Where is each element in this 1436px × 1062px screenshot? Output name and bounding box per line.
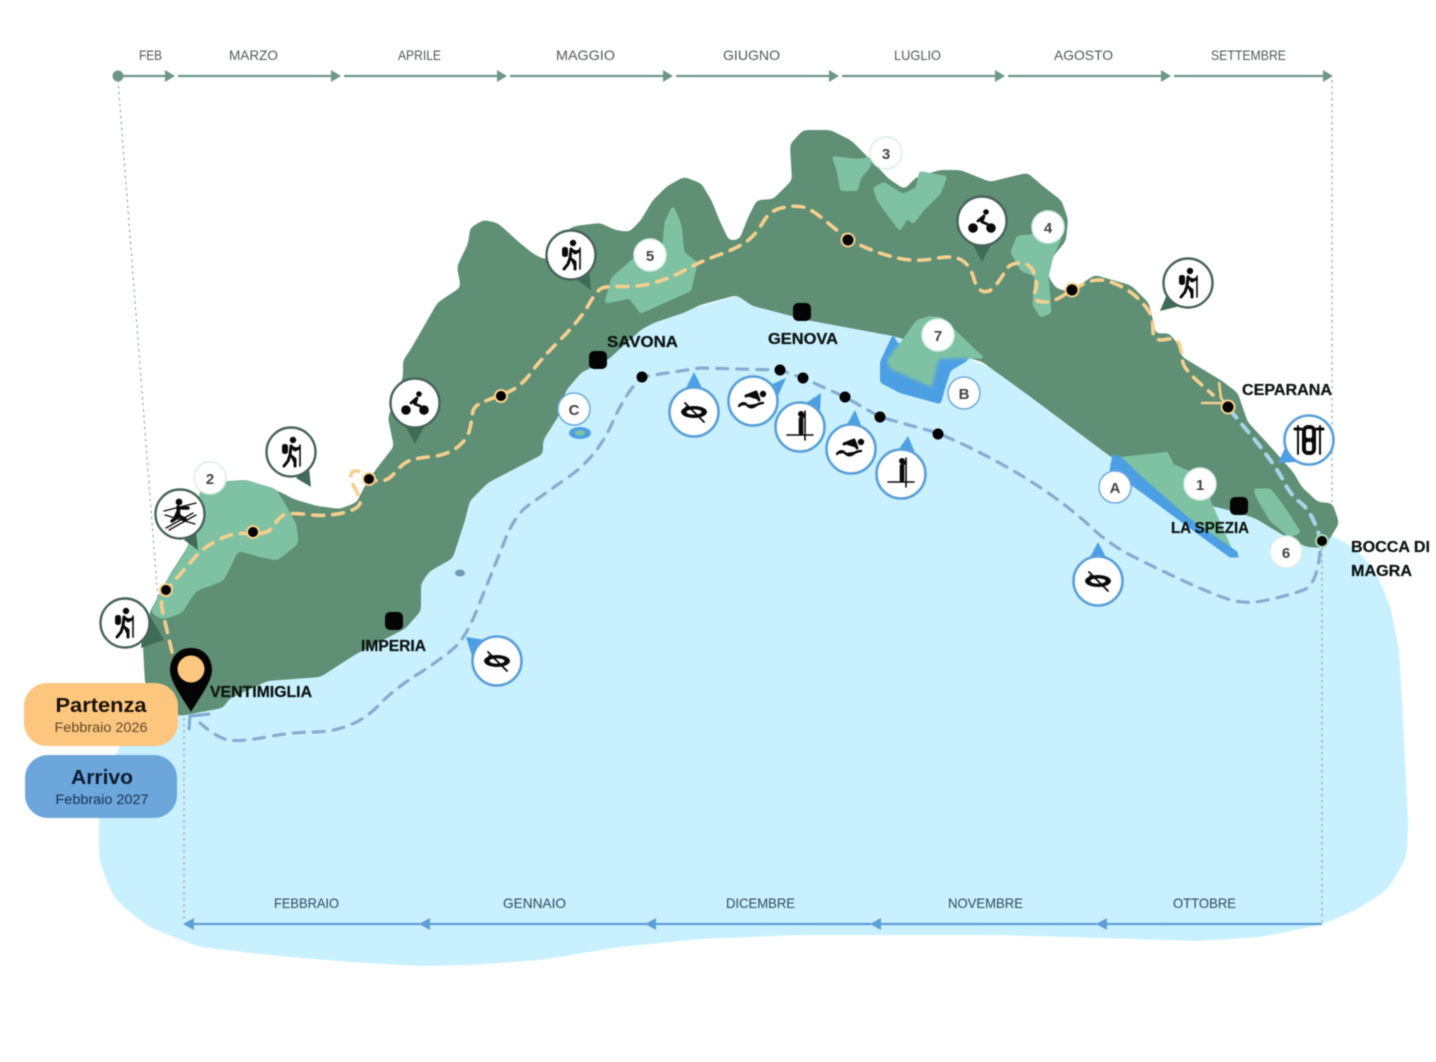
letter badges [558,377,1131,503]
small islet [455,570,465,576]
icon: swim 1 [728,376,786,426]
icon: hiker 4 [1160,258,1212,311]
city labels: SAVONA [607,334,678,351]
sea background [104,300,1403,961]
arrival pill [25,755,177,818]
icon: raft sea centre [670,372,718,436]
coast strip A and protected area 1 [1110,453,1238,557]
icon: river raft [1278,416,1334,464]
number badge labels: 1 [1196,477,1204,494]
city labels: BOCCA DI [1351,539,1430,556]
sea stops [636,364,944,440]
city labels: IMPERIA [361,638,426,655]
land mass [145,132,1337,714]
icon: hiker west [100,598,164,648]
letter badges: A [1110,480,1121,497]
city labels: MAGRA [1351,563,1412,580]
number badge labels: 7 [934,328,942,345]
river route [1230,410,1319,535]
coast strip B and protected area 7 [881,317,983,403]
city labels: GENOVA [768,331,838,348]
number badge labels: 3 [882,146,890,163]
number badge labels: 5 [646,248,654,265]
departure pill: Partenza [56,695,147,717]
bottom timeline: OTTOBRE [1173,895,1236,911]
top timeline: AGOSTO [1054,47,1113,63]
sea route [200,368,1320,741]
number badge labels [206,146,1290,562]
top timeline: APRILE [398,47,441,63]
arrival pill: Febbraio 2027 [56,791,149,807]
top timeline: FEB [139,47,162,63]
top timeline: MAGGIO [556,47,615,63]
trail cross mark at Ceparana [1201,382,1228,407]
icon: ski [156,490,204,550]
top timeline [112,47,1333,82]
icon: SUP 2 [876,436,926,498]
map: Liguria land [145,132,1337,714]
city labels [210,331,1430,701]
land trail route [162,206,1213,652]
number badge labels: 6 [1282,545,1290,562]
icon: hiker 3 [546,230,596,290]
protected area 5 [606,208,696,312]
departure pill [24,683,178,746]
island C [569,427,591,439]
bottom timeline: FEBBRAIO [274,895,339,911]
bottom timeline: DICEMBRE [726,895,795,911]
protected area 3 [833,157,946,230]
protected area 4 [1012,235,1060,316]
guide lines: dotted timeline connectors [118,80,1332,922]
protected area 6 [1255,490,1299,536]
city labels: VENTIMIGLIA [210,684,312,701]
start pin: Ventimiglia [170,648,212,712]
departure pill: Febbraio 2026 [54,719,148,735]
letter badges: C [569,402,580,419]
icon: bike 1 [390,378,440,444]
number badges [194,137,1302,568]
icon: raft west [466,636,522,686]
top timeline: GIUGNO [723,47,780,63]
trail stops [160,234,1328,596]
top timeline: SETTEMBRE [1211,47,1286,63]
icon: raft east [1074,542,1122,606]
bottom timeline [183,895,1322,930]
arrival mouth [189,714,210,730]
letter badges: B [959,386,970,403]
number badge labels: 4 [1044,220,1053,237]
icon: bike 2 [958,196,1006,262]
icon: hiker 2 [266,428,316,487]
number badge labels: 2 [206,471,214,488]
city markers [385,303,1248,630]
top timeline: LUGLIO [894,47,941,63]
icon: SUP 1 [776,393,824,452]
bottom timeline: GENNAIO [503,895,566,911]
bottom timeline: NOVEMBRE [948,895,1023,911]
icon: swim 2 [826,410,876,474]
top timeline: MARZO [229,47,278,63]
arrival pill: Arrivo [71,767,133,789]
city labels: CEPARANA [1242,382,1332,399]
protected area 2 [152,482,297,618]
city labels: LA SPEZIA [1171,520,1249,537]
